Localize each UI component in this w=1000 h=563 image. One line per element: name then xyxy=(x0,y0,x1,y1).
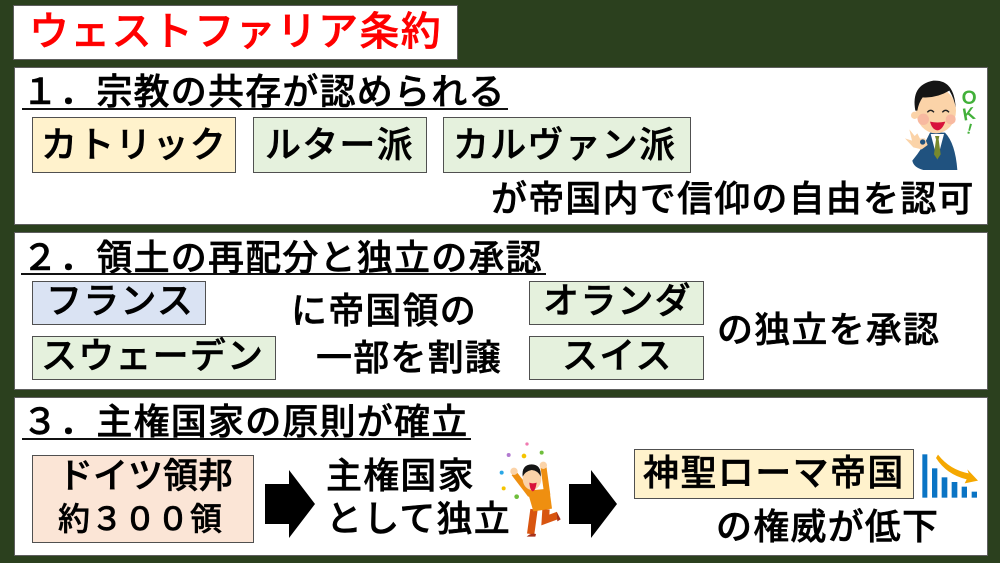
box: Catholic xyxy=(32,117,236,173)
heading 2: ２．領土の再配分と独立の承認 xyxy=(22,237,543,278)
text: ceded territory line 1: に帝国領の xyxy=(291,290,477,331)
box: France: フランス xyxy=(46,280,194,321)
box: Lutheran xyxy=(253,117,427,173)
box: Lutheran: ルター派 xyxy=(265,124,414,165)
text: freedom of faith: が帝国内で信仰の自由を認可 xyxy=(491,178,975,219)
icon: businessman saying OK: ! xyxy=(964,121,973,138)
heading 1: １．宗教の共存が認められる xyxy=(22,71,506,112)
text: sovereign state line 2: として独立 xyxy=(326,498,511,539)
icon: declining bar chart xyxy=(922,454,978,498)
icon: businessman saying OK xyxy=(905,80,977,170)
text: about 300: 約３００領 xyxy=(58,501,223,537)
text: ceded territory line 2: 一部を割譲 xyxy=(316,337,502,378)
box: Switzerland xyxy=(529,336,704,380)
panel: sovereign state principle xyxy=(14,397,988,556)
box: German states xyxy=(32,455,254,543)
icon: jumping person xyxy=(500,442,561,537)
box: Calvinist xyxy=(443,117,691,173)
icon: businessman saying OK: O xyxy=(961,88,976,108)
panel: territory redistribution xyxy=(14,232,988,390)
box: Sweden: スウェーデン xyxy=(41,335,264,376)
text: authority declines: の権威が低下 xyxy=(716,506,939,547)
text: German states: ドイツ領邦 xyxy=(58,457,233,496)
heading 1 underline xyxy=(22,108,508,110)
box: Calvinist: カルヴァン派 xyxy=(453,124,676,165)
title: ウェストファリア条約 xyxy=(29,10,442,54)
panel: religious coexistence xyxy=(14,67,988,225)
text: independence recognized: の独立を承認 xyxy=(717,309,940,350)
heading 2 underline xyxy=(21,273,546,275)
icon: businessman saying OK: K xyxy=(961,102,977,124)
text: sovereign state line 1: 主権国家 xyxy=(326,455,475,496)
heading 3: ３．主権国家の原則が確立 xyxy=(22,401,468,442)
box: Netherlands: オランダ xyxy=(543,280,692,321)
box: Holy Roman Empire: 神聖ローマ帝国 xyxy=(643,452,905,493)
box: Catholic: カトリック xyxy=(41,124,227,165)
box: Switzerland: スイス xyxy=(562,335,673,376)
heading 3 underline xyxy=(22,438,471,440)
arrow 2 xyxy=(569,470,617,538)
arrow 1 xyxy=(265,470,315,538)
